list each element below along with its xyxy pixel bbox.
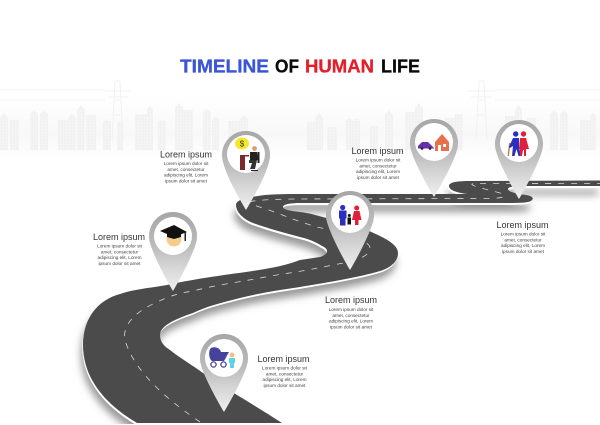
text block: child: Lorem ipsum (257, 354, 310, 364)
background haze (0, 95, 600, 160)
title: OF (275, 56, 299, 76)
text block: graduate: Lorem ipsum dolor sit (97, 244, 143, 249)
title (180, 56, 420, 76)
text block: graduate: amet, consectetur (101, 250, 139, 254)
text block: elderly: Lorem ipsum dolor sit (501, 232, 546, 237)
text block: family: ipsum dolor sit amet (330, 324, 373, 329)
icon: worker at desk: $ (240, 140, 245, 148)
road (0, 180, 600, 425)
text block: family: amet, consectetur (332, 313, 370, 318)
text block: house: amet, consectetur (359, 164, 397, 168)
text block: elderly: ipsum dolor sit amet (502, 249, 545, 254)
text block: family: Lorem ipsum dolor sit (329, 307, 374, 312)
text block: child: amet, consectetur (266, 372, 304, 376)
text block: family: Lorem ipsum (325, 295, 377, 305)
text block: elderly (496, 220, 549, 254)
title: TIMELINE (180, 56, 269, 76)
pin: elderly couple (495, 120, 543, 199)
power towers (0, 81, 600, 140)
text block: career: amet, consectetur (167, 167, 205, 172)
title: HUMAN (305, 56, 374, 76)
text block: graduate (93, 232, 145, 266)
text block: career: adipiscing elit, Lorem (164, 173, 208, 178)
text block: elderly: amet, consectetur (504, 238, 542, 242)
icon: elderly couple (508, 131, 529, 156)
text block: child: Lorem ipsum dolor sit (262, 366, 308, 371)
text block: career: Lorem ipsum (160, 150, 212, 160)
icon: stroller and toddler (209, 347, 235, 368)
title: LIFE (381, 56, 420, 76)
text block: house: Lorem ipsum dolor sit (356, 158, 401, 163)
text block: house: adipiscing elit, Lorem (356, 169, 400, 174)
pin: house and car (410, 119, 458, 197)
text block: career: ipsum dolor sit amet (165, 178, 208, 183)
text block: career: Lorem ipsum dolor sit (164, 161, 209, 166)
text block: elderly: Lorem ipsum (496, 220, 549, 230)
pin: child (200, 334, 248, 412)
text block: child (257, 354, 310, 388)
text block: family (325, 295, 377, 329)
icon: family (339, 205, 362, 226)
icon: graduate head (160, 225, 187, 246)
skyline (0, 103, 596, 150)
text block: graduate: adipiscing elit, Lorem (97, 255, 142, 260)
pin: graduate (149, 212, 197, 291)
text block: family: adipiscing elit, Lorem (329, 319, 373, 324)
text block: house: Lorem ipsum (351, 146, 404, 156)
text block: house (351, 146, 404, 180)
text block: elderly: adipiscing elit, Lorem (501, 243, 545, 248)
text block: child: adipiscing elit, Lorem (262, 377, 307, 382)
icon: car and house (418, 134, 449, 151)
text block: house: ipsum dolor sit amet (357, 175, 400, 180)
text block: graduate: ipsum dolor sit amet (99, 261, 141, 266)
text block: graduate: Lorem ipsum (93, 232, 145, 242)
text block: career (160, 150, 212, 183)
pin: family (326, 191, 374, 270)
pin: career (222, 131, 270, 210)
text block: child: ipsum dolor sit amet (264, 383, 306, 388)
